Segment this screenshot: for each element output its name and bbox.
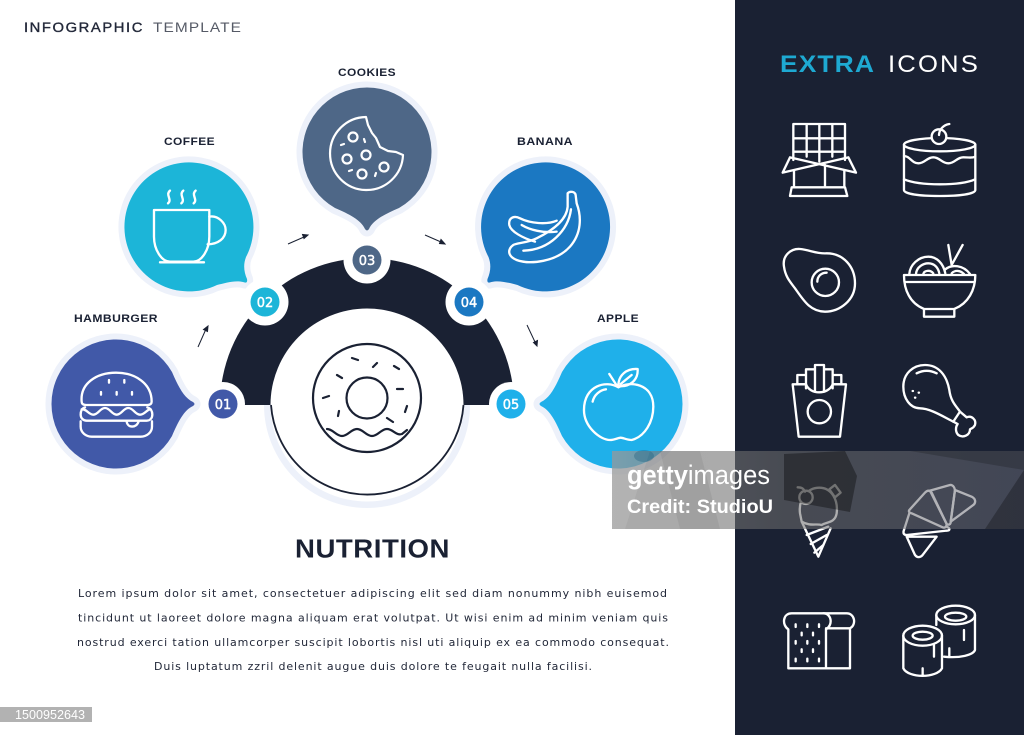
body paragraph: tincidunt ut laoreet dolore magna aliquam erat volutpat. Ut wisi enim ad minim veniam quis — [78, 612, 668, 624]
badge 05: 05 — [503, 398, 519, 413]
step 5: apple — [540, 313, 683, 468]
header: infographic label: INFOGRAPHIC — [24, 19, 144, 35]
icon: coffee cup — [154, 191, 226, 262]
icon: bread loaf — [784, 613, 854, 668]
panel heading: icons: ICONS — [888, 51, 980, 78]
numbered step badges — [201, 236, 533, 426]
central half ring — [220, 258, 514, 405]
label: coffee: COFFEE — [164, 136, 215, 148]
icon: chocolate bar — [783, 124, 856, 196]
icon: hamburger — [81, 373, 152, 437]
icon: cookie — [330, 117, 403, 190]
watermark: apple shadow — [634, 450, 654, 462]
badge 02: 02 — [257, 296, 273, 311]
central donut medallion — [264, 308, 470, 508]
icon: donut — [313, 344, 421, 452]
watermark: credit text: Credit: StudioU — [627, 496, 773, 518]
flow arrows — [198, 234, 538, 347]
step 4: banana — [481, 136, 610, 291]
label: apple: APPLE — [597, 313, 639, 325]
icon: ice cream cone — [798, 485, 841, 557]
icon: croissant — [903, 485, 975, 557]
step 2: coffee — [124, 136, 253, 291]
body paragraph: Duis luptatum zzril delenit augue duis dolore te feugait nulla facilisi. — [154, 660, 592, 673]
main heading: NUTRITION — [295, 536, 450, 564]
badge 05 — [489, 382, 533, 426]
icon: bananas — [509, 192, 580, 262]
icon: cake — [904, 124, 975, 196]
bubble: hamburger — [51, 340, 194, 468]
arrow: step 3 to 4 — [425, 235, 445, 244]
label: banana: BANANA — [517, 136, 573, 148]
icon: fried egg — [784, 249, 855, 312]
bubble: coffee — [124, 162, 253, 291]
icon: sushi rolls — [903, 606, 975, 676]
badge 02 — [242, 278, 288, 326]
badge 04: 04 — [461, 296, 477, 311]
arrow: step 4 to 5 — [527, 325, 538, 346]
icon: french fries — [793, 365, 846, 437]
icon: noodle bowl — [904, 245, 975, 317]
bubble: apple — [540, 340, 683, 468]
icon: apple — [584, 369, 653, 440]
step 1: hamburger — [51, 313, 194, 468]
image id tag: 1500952643 — [15, 708, 85, 722]
body paragraph: Lorem ipsum dolor sit amet, consectetuer adipiscing elit sed diam nonummy nibh euisemod — [78, 587, 667, 600]
header: template label: TEMPLATE — [153, 19, 242, 35]
body paragraph: nostrud exerci tation ullamcorper suscipit lobortis nisl uti aliquip ex ea commodo consequat. — [77, 636, 669, 649]
badge 01 — [201, 382, 245, 426]
arrow: step 2 to 3 — [288, 234, 308, 244]
panel heading: extra: EXTRA — [780, 51, 875, 78]
page header — [24, 19, 242, 35]
bubble: cookies — [302, 87, 432, 230]
panel: extra icons — [735, 0, 1024, 735]
arrow: step 1 to 2 — [198, 326, 208, 347]
badge 04 — [446, 278, 492, 326]
badge 03: 03 — [359, 254, 375, 269]
label: cookies: COOKIES — [338, 67, 396, 79]
watermark: dark facets — [612, 451, 1024, 529]
step 3: cookies — [302, 67, 432, 230]
icon: chicken drumstick — [903, 365, 975, 436]
badge 01: 01 — [215, 398, 231, 413]
watermark: logo text: gettyimages — [627, 460, 770, 490]
bubble: banana — [481, 162, 610, 291]
body paragraph — [77, 587, 669, 673]
watermark band — [612, 450, 1024, 529]
label: hamburger: HAMBURGER — [74, 313, 158, 325]
badge 03 — [344, 236, 390, 284]
